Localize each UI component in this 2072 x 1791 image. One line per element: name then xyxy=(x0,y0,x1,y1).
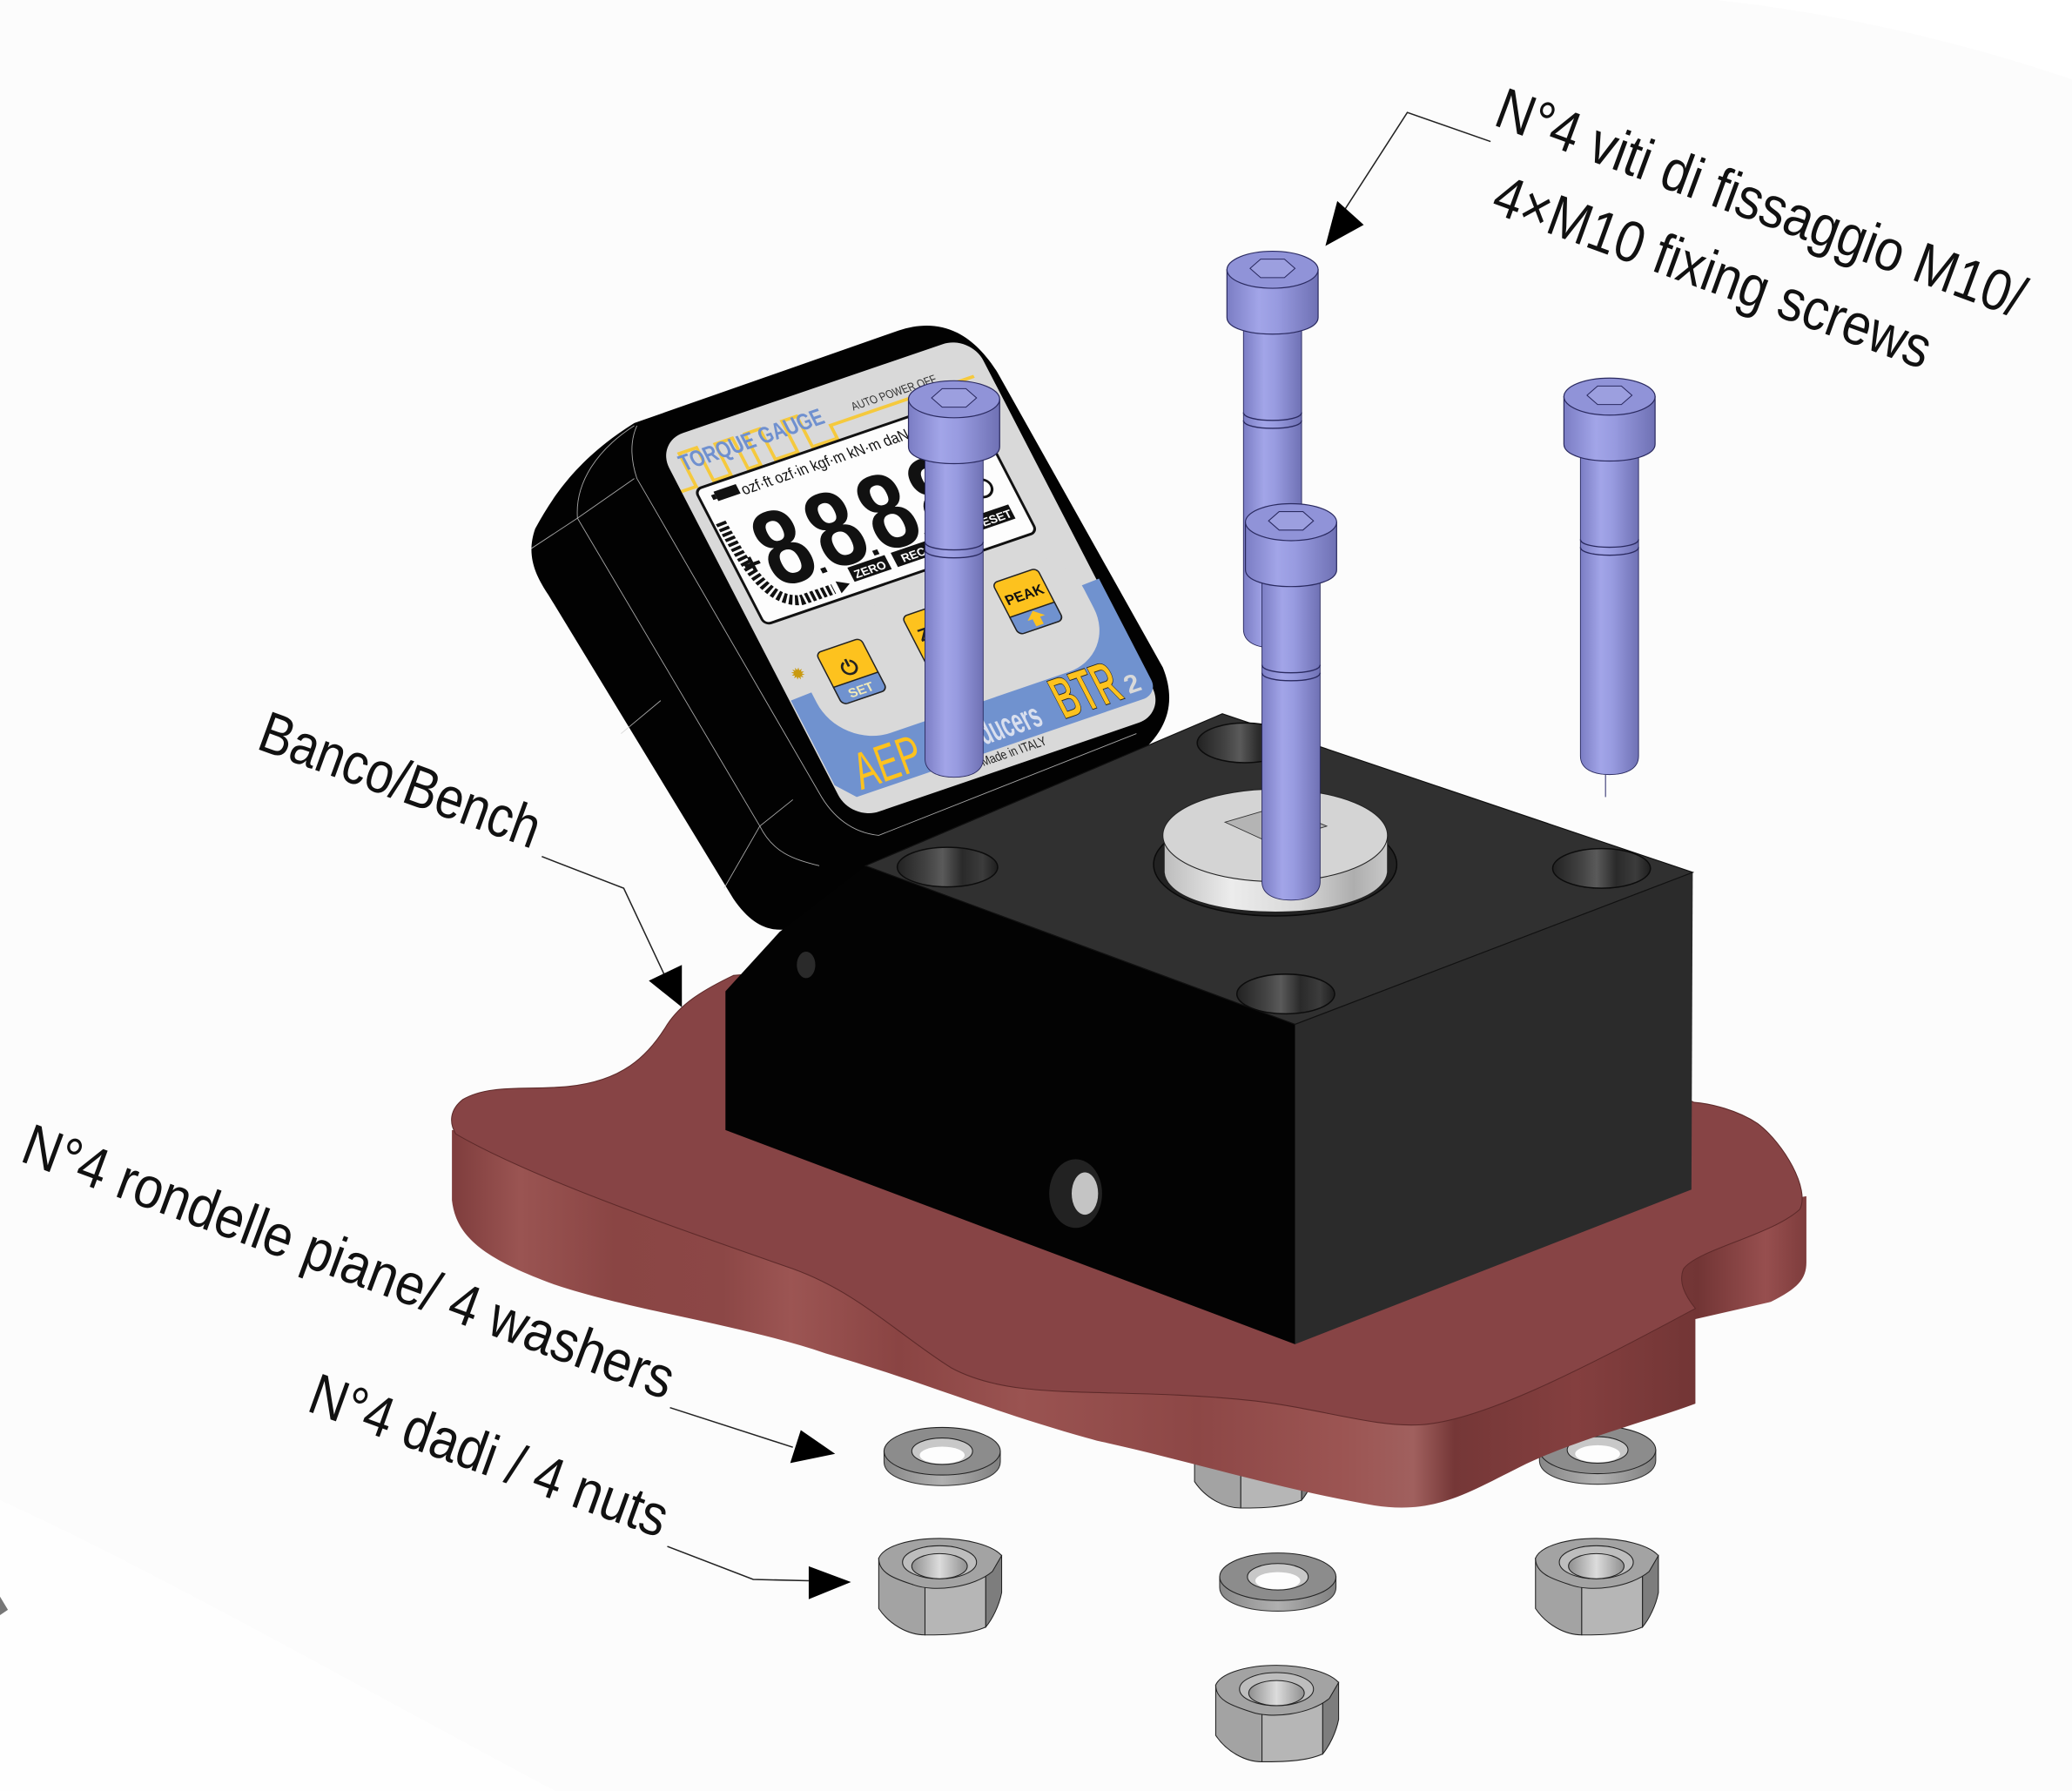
loose nuts xyxy=(878,1539,1658,1761)
sign: + xyxy=(736,545,769,582)
arrow: washers xyxy=(670,1408,835,1463)
label: washers: N°4 rondelle piane/ 4 washers xyxy=(14,1112,683,1412)
central screw xyxy=(1246,503,1336,900)
main digits: 8888 xyxy=(732,432,990,610)
right nut xyxy=(1536,1539,1658,1635)
scale arrow xyxy=(836,577,853,593)
arrow: screws xyxy=(1325,112,1490,246)
rec label xyxy=(891,540,935,567)
mounting holes xyxy=(898,723,1651,1013)
bottom nut xyxy=(1215,1666,1339,1761)
zero label: ZERO xyxy=(851,558,889,581)
yellow top decoration xyxy=(664,356,981,492)
digital torque gauge xyxy=(531,326,1169,930)
lamp icon: ✹ xyxy=(787,663,810,685)
peak button xyxy=(992,568,1064,635)
arrow: nuts xyxy=(668,1546,851,1599)
block top face xyxy=(865,714,1692,1024)
centre washer xyxy=(1220,1553,1336,1611)
decimal points xyxy=(820,531,932,574)
made in Italy: Made in ITALY xyxy=(979,734,1049,770)
label: bench: Banco/Bench xyxy=(251,700,549,861)
LCD background xyxy=(695,397,1037,625)
torque transducer block xyxy=(725,714,1692,1344)
bench plate xyxy=(452,926,1806,1508)
right screw xyxy=(1564,378,1655,797)
label: nuts: N°4 dadi / 4 nuts xyxy=(301,1362,677,1550)
nut behind plate xyxy=(1194,1411,1317,1508)
unit labels: ozf·ft ozf·in kgf·m kN·m daN·m N·m xyxy=(738,411,956,498)
gauge housing xyxy=(531,326,1169,930)
rec label: REC xyxy=(898,545,928,565)
left washer xyxy=(884,1427,1000,1485)
peak button: PEAK xyxy=(1002,581,1046,609)
face background xyxy=(656,335,1166,821)
arrow: bench xyxy=(542,857,682,1007)
plate top face xyxy=(452,926,1802,1425)
washer behind plate xyxy=(1539,1426,1656,1485)
zero label xyxy=(847,555,891,582)
side hole small xyxy=(797,952,816,978)
scale ticks xyxy=(721,500,834,612)
set button: SET xyxy=(846,679,878,701)
model 2: 2 xyxy=(1119,670,1146,699)
label: screws: 4×M10 fixing screws xyxy=(1484,164,1941,381)
AEP logo: AEP xyxy=(839,724,932,800)
blue lower band xyxy=(784,579,1159,802)
housing contour lines xyxy=(531,426,1136,888)
screw in front of gauge xyxy=(909,380,999,778)
battery icon xyxy=(710,484,741,502)
LCD display xyxy=(695,397,1037,625)
central hub xyxy=(1154,789,1396,916)
plate side wall xyxy=(452,1130,1806,1508)
left nut xyxy=(878,1539,1002,1635)
set button xyxy=(816,638,887,705)
set button: ⏻ xyxy=(837,655,863,681)
loose washers xyxy=(884,1427,1336,1611)
rear screw xyxy=(1227,252,1318,648)
gray button pill xyxy=(783,542,1118,750)
transducers: transducers xyxy=(925,696,1048,767)
gauge face panel xyxy=(656,334,1168,821)
reset label: RESET xyxy=(972,507,1015,532)
reset icon xyxy=(970,477,995,500)
auto power off: AUTO POWER OFF xyxy=(849,373,938,413)
brand title: TORQUE GAUGE xyxy=(674,403,829,476)
zero button: Z xyxy=(914,624,934,646)
zero button xyxy=(902,602,973,669)
block right face xyxy=(1295,872,1692,1344)
side hole large xyxy=(1049,1159,1102,1228)
BTR mark: BTR xyxy=(1039,649,1132,731)
block left face xyxy=(725,865,1295,1344)
fixing screws xyxy=(909,252,1655,900)
